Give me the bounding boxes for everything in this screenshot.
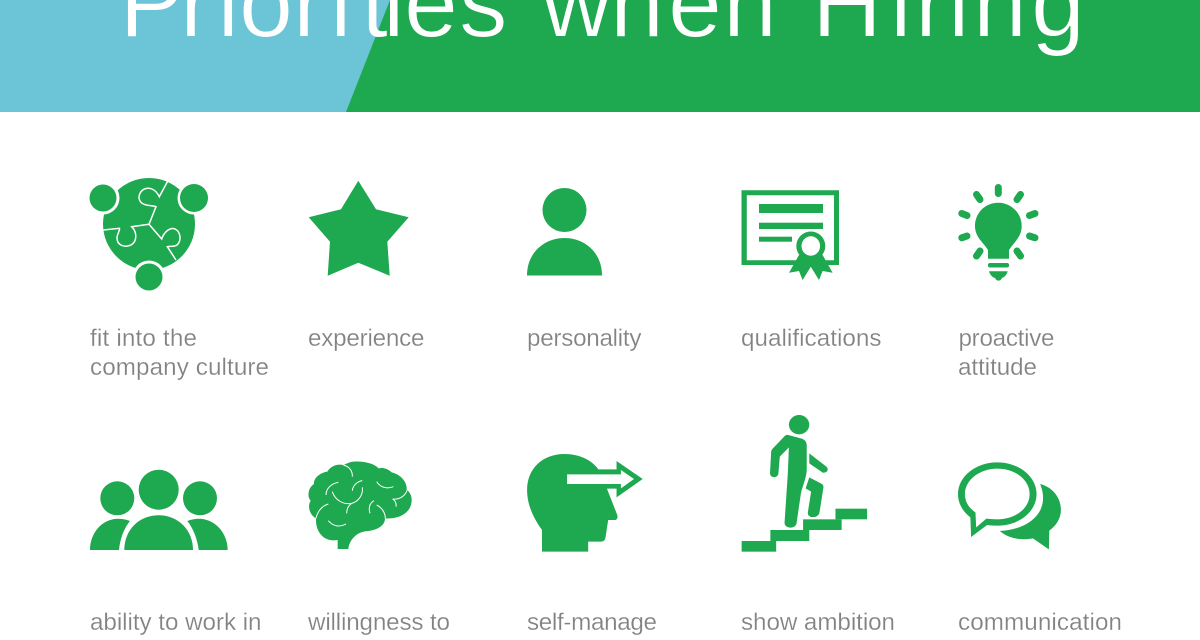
icon: light bulb: [962, 188, 1035, 281]
icon: team of three: [90, 470, 228, 550]
icon: person climbing stairs: [742, 415, 867, 552]
label: proactive attitude: attitude: [958, 354, 1037, 381]
icon: puzzle team: [86, 178, 210, 294]
icon: head with arrow: [527, 454, 643, 552]
label: qualifications: qualifications: [741, 325, 882, 352]
header banner: [0, 0, 1200, 112]
icon: person: [527, 188, 602, 276]
label: ability to work in: ability to work in: [90, 609, 262, 636]
label: proactive attitude: [958, 325, 1054, 381]
label: fit into the company culture: fit into the: [90, 325, 197, 352]
icon: star: [309, 181, 409, 276]
label: proactive attitude: proactive: [958, 325, 1054, 352]
icon: certificate: [742, 190, 839, 280]
label: personality: personality: [527, 325, 642, 352]
label: experience: experience: [308, 325, 424, 352]
label: self-manage: self-manage: [527, 609, 657, 636]
label: fit into the company culture: company culture: [90, 354, 269, 381]
label: show ambition: show ambition: [741, 609, 895, 636]
icon: speech bubbles: [958, 462, 1061, 549]
label: willingness to: willingness to: [307, 609, 450, 636]
icon: brain: [308, 462, 412, 549]
label: communication: communication: [958, 609, 1122, 636]
label: fit into the company culture: [90, 325, 269, 381]
